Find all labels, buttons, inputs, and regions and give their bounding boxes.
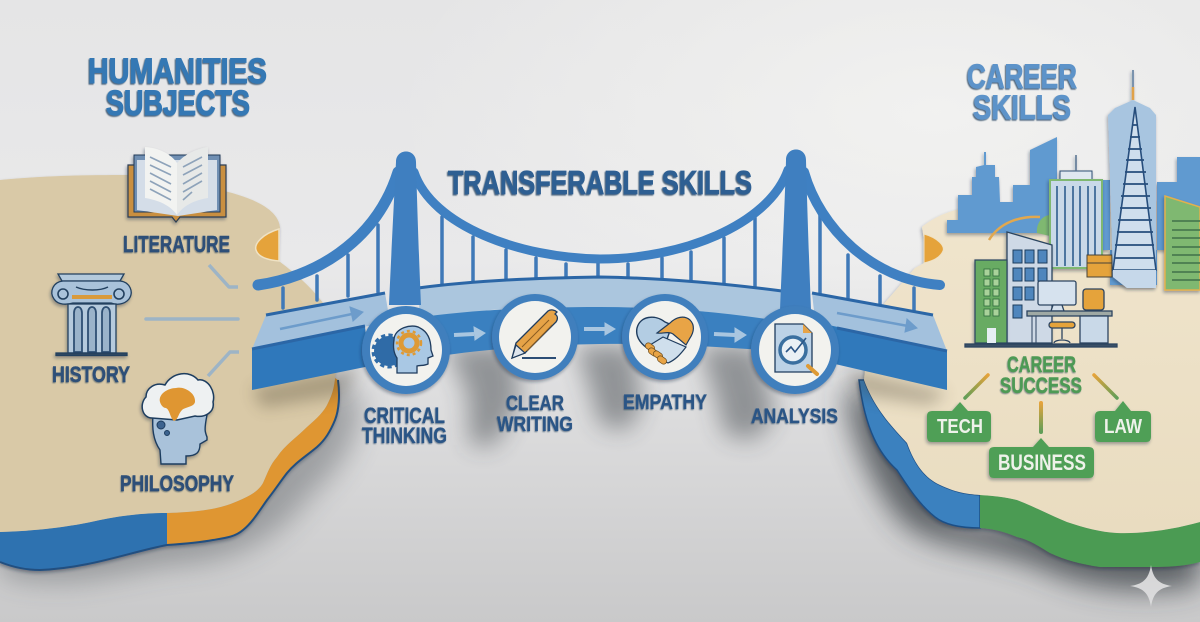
arrow: career success to tech xyxy=(965,375,988,398)
tag: tech xyxy=(927,402,991,442)
orange crate xyxy=(1087,255,1112,277)
deck shadows on the lands xyxy=(252,365,947,408)
arrow: philosophy connector xyxy=(208,352,239,376)
left land surface xyxy=(0,175,340,532)
label: critical thinking: THINKING xyxy=(362,423,447,448)
panel: career land xyxy=(859,200,1200,567)
tag: law xyxy=(1095,401,1151,442)
striped mid tower xyxy=(1050,155,1102,268)
label: career success: CAREER xyxy=(1007,352,1076,377)
label: critical thinking: CRITICAL xyxy=(364,403,445,428)
icon: clear writing badge xyxy=(492,294,578,380)
label: empathy: EMPATHY xyxy=(623,391,707,414)
bridge deck xyxy=(252,277,947,390)
title: career skills xyxy=(967,58,1077,127)
arrow: career success to business xyxy=(1039,403,1043,432)
title: transferable skills: TRANSFERABLE SKILLS xyxy=(448,164,752,201)
title: humanities subjects: HUMANITIES xyxy=(88,52,267,91)
label: clear writing xyxy=(497,392,573,436)
label: critical thinking xyxy=(362,403,447,448)
title: career skills: CAREER xyxy=(967,58,1077,96)
cast shadows on the wall xyxy=(0,345,1200,590)
desk with monitor and chair xyxy=(965,281,1117,347)
tag: business: BUSINESS xyxy=(998,450,1086,475)
right land surface xyxy=(864,200,1200,533)
right land colored band xyxy=(859,380,1200,567)
label: career success: SUCCESS xyxy=(1000,373,1082,398)
orange arc and green bush xyxy=(989,217,1040,240)
icon: empathy badge xyxy=(622,294,708,380)
icon: analysis badge xyxy=(751,306,839,394)
label: career success xyxy=(1000,352,1082,398)
bridge cables and hangers xyxy=(258,170,940,310)
icon: ionic column xyxy=(52,274,131,356)
label: clear writing: CLEAR xyxy=(506,392,564,415)
icon: philosophy head with brain xyxy=(142,374,214,464)
back blue skyline xyxy=(947,137,1200,285)
label: history: HISTORY xyxy=(52,362,130,387)
title: humanities subjects xyxy=(88,52,267,123)
label: literature: LITERATURE xyxy=(123,231,230,257)
deck arrows xyxy=(280,307,917,342)
left land colored band xyxy=(0,378,339,570)
icon: open book xyxy=(128,147,226,222)
bridge xyxy=(252,150,947,390)
arrow: history connector xyxy=(146,317,238,321)
icon: critical thinking badge xyxy=(362,306,450,394)
label: clear writing: WRITING xyxy=(497,413,573,436)
panel: humanities land xyxy=(0,175,340,570)
pyramid skyscraper xyxy=(1108,70,1156,288)
white office tower xyxy=(1007,232,1052,343)
label: philosophy: PHILOSOPHY xyxy=(120,471,234,496)
green office tower xyxy=(975,260,1007,343)
icon: office building and desk xyxy=(965,232,1117,347)
label: analysis: ANALYSIS xyxy=(751,405,838,428)
tag: tech: TECH xyxy=(937,416,983,438)
icon: left orange notch xyxy=(256,229,279,261)
tag: law: LAW xyxy=(1104,416,1142,438)
title: career skills: SKILLS xyxy=(973,89,1071,127)
icon: sparkle watermark xyxy=(1130,565,1172,607)
icon: right orange notch xyxy=(924,234,943,263)
tag: business xyxy=(989,438,1094,478)
title: humanities subjects: SUBJECTS xyxy=(106,84,250,123)
arrow: career success to law xyxy=(1094,375,1117,398)
arrow: literature connector xyxy=(209,265,238,287)
bridge towers xyxy=(389,150,811,310)
green right building xyxy=(1165,196,1200,290)
icon: city skyline xyxy=(947,70,1200,290)
